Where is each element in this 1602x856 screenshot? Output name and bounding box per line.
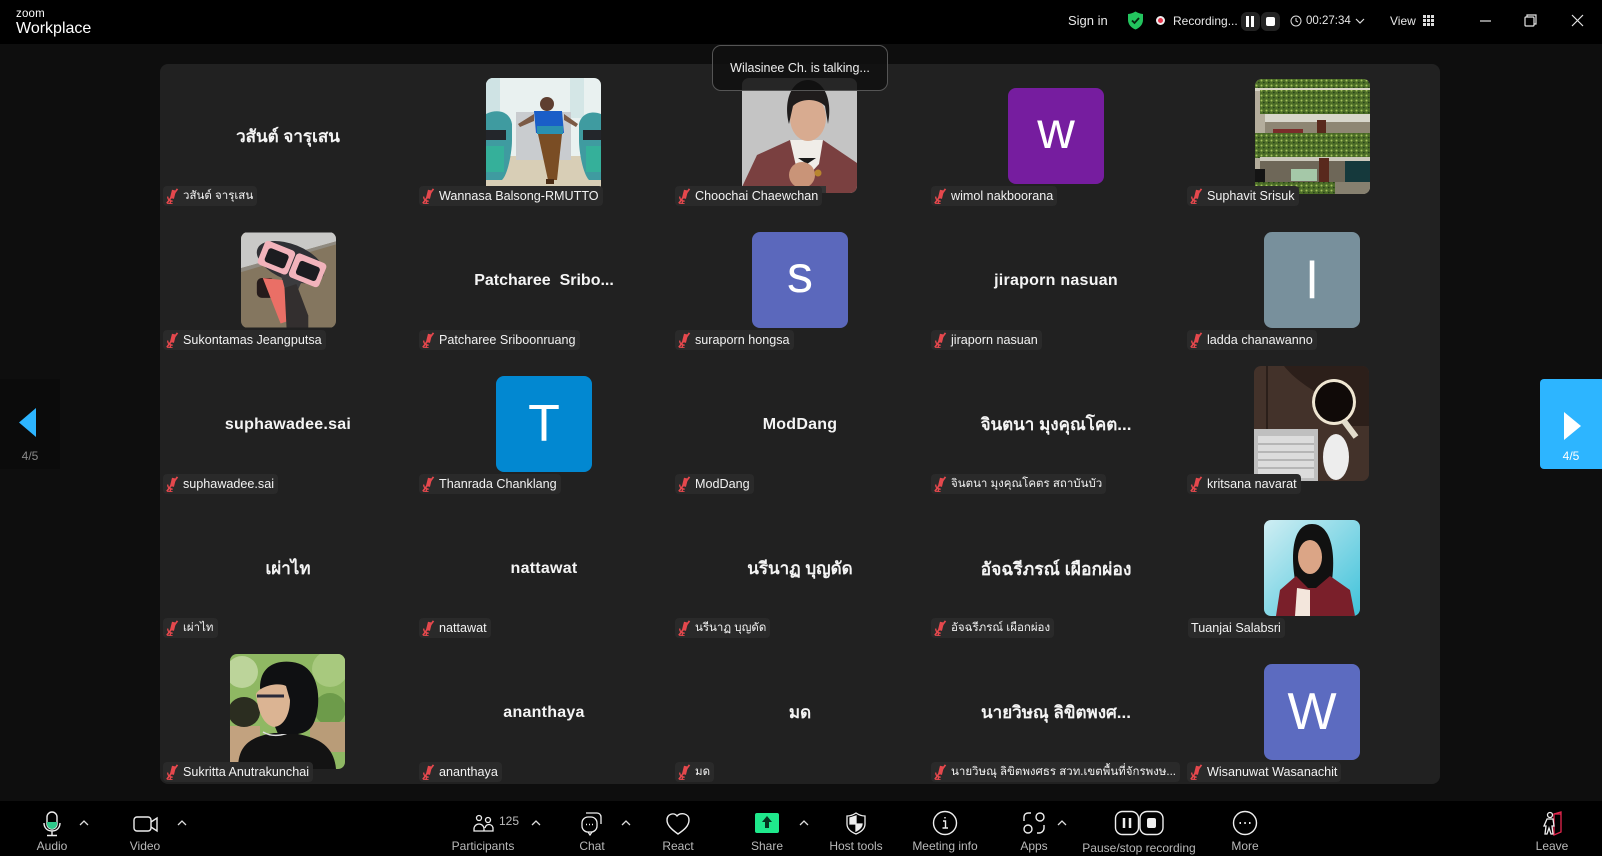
tile photo: kritsana xyxy=(1254,366,1369,481)
label: kritsana: kritsana navarat xyxy=(1207,477,1297,491)
right page arrow xyxy=(1540,379,1602,469)
label: ananthaya: ananthaya xyxy=(439,765,498,779)
more button: More xyxy=(1231,839,1259,853)
video button: Video xyxy=(130,839,160,853)
logo: zoom Workplace: zoom xyxy=(16,8,45,20)
label: มด: มด xyxy=(695,766,710,778)
name label: row 1 xyxy=(163,186,1299,206)
label: kritsana xyxy=(1187,474,1301,494)
name label: row 3 xyxy=(163,474,1301,494)
tile: suphawadee name: suphawadee.sai xyxy=(225,416,351,433)
tile avatar: Thanrada xyxy=(496,376,592,472)
logo: zoom Workplace xyxy=(16,8,91,37)
tile avatar: Wisanuwat xyxy=(1264,664,1360,760)
label: นรีนาฏ xyxy=(675,618,770,638)
icon: security shield xyxy=(1128,12,1143,30)
tile: เผ่าไท name: เผ่าไท xyxy=(265,559,311,578)
tile: มด name: มด xyxy=(789,703,811,722)
tile: jiraporn name: jiraporn nasuan xyxy=(994,272,1118,289)
name label: row 2 xyxy=(163,330,1317,350)
label: suphawadee: suphawadee.sai xyxy=(183,477,274,491)
icon: stop xyxy=(1261,12,1280,31)
share button: Share xyxy=(751,839,783,853)
label: Sukritta xyxy=(163,762,313,782)
tile avatar: ladda: l xyxy=(1306,252,1318,310)
tile: นรีนาฏ name: นรีนาฏ บุญดัด xyxy=(747,559,853,578)
host tools button: Host tools xyxy=(829,839,883,853)
label: Suphavit: Suphavit Srisuk xyxy=(1207,189,1294,203)
label: Choochai: Choochai Chaewchan xyxy=(695,189,818,203)
tile photo: Choochai xyxy=(742,78,857,193)
label: nattawat xyxy=(419,618,491,638)
label: Patcharee xyxy=(419,330,580,350)
label: วสันต์ จารุเสน: วสันต์ จารุเสน xyxy=(183,190,253,202)
label: jiraporn xyxy=(931,330,1042,350)
more button xyxy=(1231,810,1259,853)
label: jiraporn: jiraporn nasuan xyxy=(951,333,1038,347)
chat button: Chat xyxy=(579,839,605,853)
label: อัจฉรีภรณ์ xyxy=(931,618,1054,638)
audio button xyxy=(36,811,67,853)
view button: View xyxy=(1390,14,1416,28)
pause/stop recording button xyxy=(1082,810,1196,855)
icon: recording dot xyxy=(1156,16,1165,25)
recording text: Recording... xyxy=(1173,14,1238,28)
tile photo: Suphavit xyxy=(1255,79,1370,194)
name label: row 4 xyxy=(163,618,1285,638)
label: นายวิษณุ xyxy=(931,762,1180,782)
label: Sukritta: Sukritta Anutrakunchai xyxy=(183,765,309,779)
video chevron xyxy=(178,820,186,826)
label: Wisanuwat: Wisanuwat Wasanachit xyxy=(1207,765,1337,779)
tooltip: talking indicator xyxy=(712,45,888,91)
label: Sukontamas xyxy=(163,330,326,350)
sign in: Sign in xyxy=(1068,13,1108,28)
react button xyxy=(662,813,694,853)
share chevron xyxy=(800,820,808,826)
leave button: Leave xyxy=(1536,839,1568,853)
tile avatar: suraporn: s xyxy=(787,246,813,304)
label: มด xyxy=(675,762,714,782)
page indicator: 4/5 xyxy=(22,449,38,463)
tile avatar: suraporn xyxy=(752,232,848,328)
window controls xyxy=(1480,14,1584,27)
top bar xyxy=(0,0,1602,44)
label: นรีนาฏ: นรีนาฏ บุญดัด xyxy=(695,622,766,634)
label: Suphavit xyxy=(1187,186,1298,206)
apps chevron xyxy=(1058,820,1066,826)
host tools button xyxy=(829,812,883,853)
label: นายวิษณุ: นายวิษณุ ลิขิตพงศธร สวท.เขตพื้นที่จักรพงษ... xyxy=(951,766,1176,778)
label: เผ่าไท: เผ่าไท xyxy=(183,622,214,634)
meeting timer xyxy=(1290,15,1364,27)
tile: ModDang name: ModDang xyxy=(763,416,837,433)
label: suraporn xyxy=(675,330,794,350)
chat chevron xyxy=(622,820,630,826)
leave button xyxy=(1536,811,1568,853)
tile avatar: Thanrada: T xyxy=(528,395,560,453)
audio chevron xyxy=(80,820,88,826)
apps button xyxy=(1020,812,1048,853)
meeting info button xyxy=(912,810,978,853)
chat button xyxy=(579,812,605,853)
bottom toolbar xyxy=(0,801,1602,856)
icon: left triangle xyxy=(19,408,36,437)
label: wimol xyxy=(931,186,1057,206)
tile photo: Tuanjai xyxy=(1264,520,1360,616)
label: วสันต์ จารุเสน xyxy=(163,186,257,206)
page indicator: 4/5 xyxy=(1563,449,1579,463)
tile avatar: Wisanuwat: W xyxy=(1287,683,1337,741)
label: Wisanuwat xyxy=(1187,762,1341,782)
label: Wannasa xyxy=(419,186,603,206)
label: ananthaya xyxy=(419,762,502,782)
label: Tuanjai xyxy=(1188,618,1285,638)
label: Thanrada: Thanrada Chanklang xyxy=(439,477,557,491)
apps button: Apps xyxy=(1020,839,1048,853)
view button xyxy=(1390,14,1434,28)
tile: nattawat name: nattawat xyxy=(511,560,577,577)
label: ModDang xyxy=(675,474,754,494)
participants button: Participants xyxy=(452,839,514,853)
react button: React xyxy=(662,839,694,853)
tooltip: talking indicator: Wilasinee Ch. is talking... xyxy=(730,61,870,75)
logo: zoom Workplace: Workplace xyxy=(16,20,91,37)
tile avatar: wimol xyxy=(1008,88,1104,184)
tile: อัจฉรีภรณ์ name: อัจฉรีภรณ์ เผือกผ่อง xyxy=(981,559,1131,579)
label: อัจฉรีภรณ์: อัจฉรีภรณ์ เผือกผ่อง xyxy=(951,622,1050,634)
tile: นายวิษณุ name: นายวิษณุ ลิขิตพงศ... xyxy=(981,703,1131,722)
label: ModDang: ModDang xyxy=(695,477,750,491)
tile: Patcharee name: Patcharee Sribo... xyxy=(474,272,614,289)
label: ladda: ladda chanawanno xyxy=(1207,333,1313,347)
pause/stop recording button: Pause/stop recording xyxy=(1082,841,1196,855)
label: จินตนา: จินตนา มุงคุณโคตร สถาบันบัว xyxy=(951,478,1102,490)
label: จินตนา xyxy=(931,474,1106,494)
label: Patcharee: Patcharee Sriboonruang xyxy=(439,333,576,347)
tile photo: Wannasa xyxy=(486,78,601,186)
tile: จินตนา name: จินตนา มุงคุณโคต... xyxy=(981,415,1131,434)
tile avatar: wimol: w xyxy=(1037,102,1075,160)
recording status xyxy=(1156,12,1280,31)
label: suraporn: suraporn hongsa xyxy=(695,333,790,347)
tile photo: Sukontamas xyxy=(241,232,336,328)
tile photo: Sukritta xyxy=(230,654,345,769)
label: nattawat: nattawat xyxy=(439,621,487,635)
label: Sukontamas: Sukontamas Jeangputsa xyxy=(183,333,322,347)
left page arrow xyxy=(0,379,60,469)
name label: row 5 xyxy=(163,762,1341,782)
label: Tuanjai: Tuanjai Salabsri xyxy=(1191,621,1281,635)
participant gallery panel xyxy=(160,64,1440,784)
label: Choochai xyxy=(675,186,822,206)
tile: วสันต์ จารุเสน name: วสันต์ จารุเสน xyxy=(236,127,340,146)
label: Thanrada xyxy=(419,474,561,494)
share button xyxy=(751,813,783,853)
tile avatar: ladda xyxy=(1264,232,1360,328)
participant count: 125 xyxy=(499,814,519,828)
label: suphawadee xyxy=(163,474,278,494)
audio button: Audio xyxy=(37,839,67,853)
label: ladda xyxy=(1187,330,1317,350)
participants button xyxy=(452,814,514,853)
meeting info button: Meeting info xyxy=(912,839,978,853)
meeting timer: 00:27:34 xyxy=(1306,15,1351,27)
icon: right triangle xyxy=(1564,412,1581,440)
icon: pause xyxy=(1241,12,1260,31)
label: เผ่าไท xyxy=(163,618,218,638)
participants chevron xyxy=(532,820,540,826)
label: wimol: wimol nakboorana xyxy=(951,189,1053,203)
video button xyxy=(130,816,160,853)
tile: ananthaya name: ananthaya xyxy=(503,704,585,721)
label: Wannasa: Wannasa Balsong-RMUTTO xyxy=(439,189,599,203)
